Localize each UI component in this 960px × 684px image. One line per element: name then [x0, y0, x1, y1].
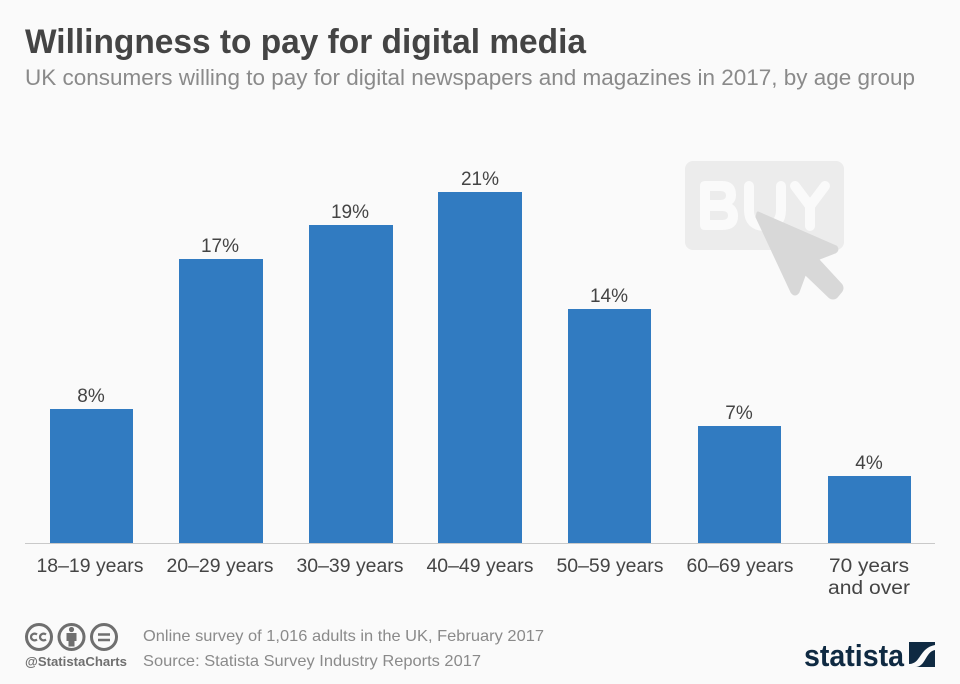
bar: 70 years and over: 70 years — [829, 556, 909, 577]
bar: 40–49 years — [426, 169, 534, 577]
handle: StatistaCharts: @StatistaCharts — [25, 655, 127, 669]
bar: 18–19 years: 8% — [77, 386, 105, 407]
bar: 60–69 years — [686, 403, 794, 577]
icon: creative commons licence — [26, 624, 116, 650]
bar: 70 years and over: and over — [828, 578, 911, 599]
bar: 60–69 years: 7% — [725, 403, 753, 424]
title: Willingness to pay for digital media — [25, 23, 587, 61]
bar: 30–39 years: 19% — [331, 202, 369, 223]
bar chart — [25, 169, 935, 599]
bar: 20–29 years — [166, 236, 274, 577]
bar: 20–29 years: 20–29 years — [166, 556, 274, 577]
bar: 70 years and over — [828, 453, 911, 599]
bar: 50–59 years — [556, 286, 664, 577]
bar: 40–49 years: 40–49 years — [426, 556, 534, 577]
bar: 70 years and over: 4% — [855, 453, 883, 474]
subtitle: UK consumers willing to pay for digital newspapers and magazines in 2017, by age group — [25, 65, 915, 90]
survey note: Online survey of 1,016 adults in the UK, February 2017 — [143, 628, 544, 645]
logo: statista: statista — [804, 638, 905, 673]
icon: buy button with cursor — [685, 161, 844, 298]
bar: 20–29 years: 17% — [201, 236, 239, 257]
bar: 50–59 years: 50–59 years — [556, 556, 664, 577]
bar: 30–39 years: 30–39 years — [296, 556, 404, 577]
bar: 50–59 years: 14% — [590, 286, 628, 307]
bar: 60–69 years: 60–69 years — [686, 556, 794, 577]
bar: 30–39 years — [296, 202, 404, 577]
bar: 40–49 years: 21% — [461, 169, 499, 190]
bar: 18–19 years — [36, 386, 144, 577]
source note: Source: Statista Survey Industry Reports 2017 — [143, 653, 481, 670]
bar: 18–19 years: 18–19 years — [36, 556, 144, 577]
